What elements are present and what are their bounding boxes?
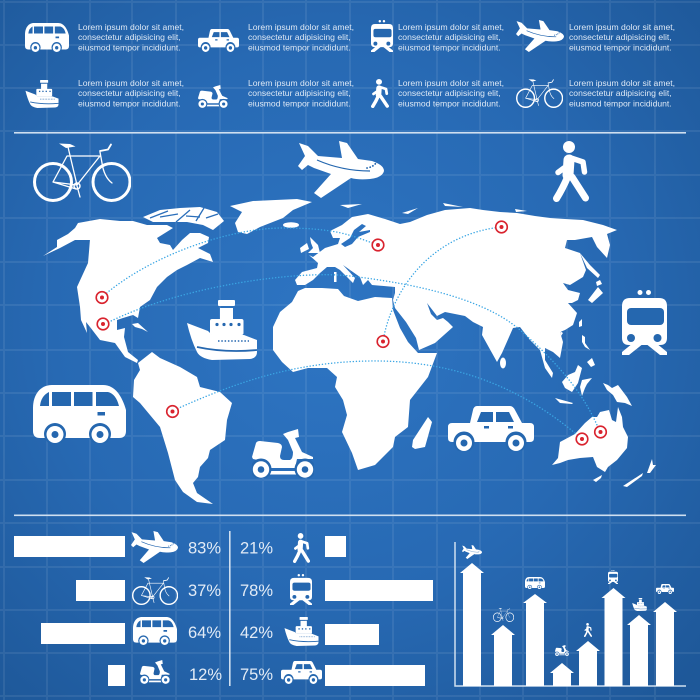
arrow: bus: [523, 577, 547, 686]
legend item: pedestrian: consectetur adipisicing elit,: [398, 88, 501, 98]
legend item: plane: consectetur adipisicing elit,: [569, 32, 672, 42]
Philippines: [582, 335, 595, 367]
row: plane 83%: [14, 531, 221, 563]
arrow: train: [602, 570, 626, 686]
Arctic island channels: [150, 208, 218, 222]
icon: bicycle: [34, 144, 130, 200]
arrow: pedestrian: [576, 623, 600, 686]
arrow: car: [653, 584, 677, 686]
legend item: scooter: Lorem ipsum dolor sit amet,: [248, 78, 354, 88]
row: bicycle 37%: 37%: [188, 582, 221, 600]
row: bus 64%: 64%: [188, 624, 221, 642]
icon: plane: [298, 141, 384, 198]
North America: [43, 219, 213, 363]
top legend: [25, 20, 675, 109]
legend item: car: Lorem ipsum dolor sit amet,: [248, 22, 354, 32]
Arctic islands: [143, 207, 224, 230]
legend item: bicycle: eiusmod tempor incididunt.: [569, 98, 672, 108]
Java: [555, 398, 573, 404]
Sulawesi: [580, 378, 592, 396]
row: scooter 12%: [108, 660, 222, 686]
route lines: [102, 227, 600, 439]
legend item: train: consectetur adipisicing elit,: [398, 32, 501, 42]
row: bicycle 37%: [76, 577, 221, 604]
arrow: bicycle: [491, 608, 515, 686]
legend item: train: [371, 20, 504, 52]
row: pedestrian 21%: [240, 533, 346, 561]
New Zealand: [623, 459, 656, 487]
icon: bus: [33, 385, 126, 445]
legend item: bus: consectetur adipisicing elit,: [78, 32, 181, 42]
legend item: scooter: eiusmod tempor incididunt.: [248, 98, 351, 108]
row: pedestrian 21%: 21%: [240, 540, 273, 558]
legend item: pedestrian: eiusmod tempor incididunt.: [398, 98, 501, 108]
arrow: plane: [460, 545, 484, 686]
Madagascar: [412, 417, 432, 449]
row: scooter 12%: 12%: [189, 666, 222, 684]
UK and Ireland: [300, 237, 320, 253]
row: plane 83%: 83%: [188, 540, 221, 558]
legend item: scooter: [197, 78, 354, 109]
legend item: bus: [25, 22, 184, 53]
legend item: bicycle: consectetur adipisicing elit,: [569, 88, 672, 98]
world map: [43, 199, 656, 504]
icon: ship: [187, 300, 257, 360]
row: ship 42%: 42%: [240, 624, 273, 642]
row: ship 42%: [240, 617, 379, 646]
Cuba: [132, 323, 148, 332]
legend item: plane: eiusmod tempor incididunt.: [569, 42, 672, 52]
legend item: bus: Lorem ipsum dolor sit amet,: [78, 22, 184, 32]
Baltic Sea cutout: [341, 224, 370, 247]
Tasmania: [593, 475, 602, 482]
legend item: ship: consectetur adipisicing elit,: [78, 88, 181, 98]
icon: car: [448, 406, 534, 452]
icon: scooter: [250, 429, 316, 480]
row: train 78%: 78%: [240, 582, 273, 600]
legend item: pedestrian: [373, 78, 504, 108]
Taiwan and Hainan: [560, 319, 582, 336]
South America: [133, 352, 232, 504]
legend item: plane: Lorem ipsum dolor sit amet,: [569, 22, 675, 32]
legend item: car: [198, 22, 354, 53]
Africa: [273, 288, 437, 470]
legend item: ship: [25, 78, 184, 108]
row: car 75%: [240, 661, 425, 686]
Corsica and Sardinia: [334, 272, 336, 282]
legend item: bicycle: Lorem ipsum dolor sit amet,: [569, 78, 675, 88]
legend item: train: Lorem ipsum dolor sit amet,: [398, 22, 504, 32]
Sakhalin and Japan: [580, 253, 603, 303]
large transport icons: [33, 141, 667, 480]
legend item: car: eiusmod tempor incididunt.: [248, 42, 351, 52]
Greenland: [230, 199, 312, 234]
map pins: [96, 221, 606, 445]
legend item: train: eiusmod tempor incididunt.: [398, 42, 501, 52]
row: car 75%: 75%: [240, 666, 273, 684]
Sri Lanka: [500, 358, 506, 368]
arrow: ship: [627, 598, 651, 686]
legend item: scooter: consectetur adipisicing elit,: [248, 88, 351, 98]
legend item: car: consectetur adipisicing elit,: [248, 32, 351, 42]
legend item: plane: [516, 20, 675, 52]
Borneo: [562, 365, 582, 392]
New Guinea: [603, 383, 632, 406]
legend item: ship: eiusmod tempor incididunt.: [78, 98, 181, 108]
icon: pedestrian: [556, 141, 586, 198]
Australia: [552, 407, 628, 472]
legend item: ship: Lorem ipsum dolor sit amet,: [78, 78, 184, 88]
arrow bar chart: [455, 542, 686, 686]
percentage bars: left column: [14, 531, 222, 686]
chart axes: [455, 542, 686, 686]
row: train 78%: [240, 574, 433, 605]
legend item: bicycle: [517, 78, 675, 108]
arrow: scooter: [550, 645, 574, 686]
Eurasia: [295, 208, 617, 378]
legend item: bus: eiusmod tempor incididunt.: [78, 42, 181, 52]
icon: train: [622, 290, 667, 355]
legend item: pedestrian: Lorem ipsum dolor sit amet,: [398, 78, 504, 88]
Russian Arctic islands: [340, 203, 527, 214]
Iceland: [283, 222, 299, 228]
row: bus 64%: [41, 617, 221, 646]
percentage bars: right column: [240, 533, 433, 686]
